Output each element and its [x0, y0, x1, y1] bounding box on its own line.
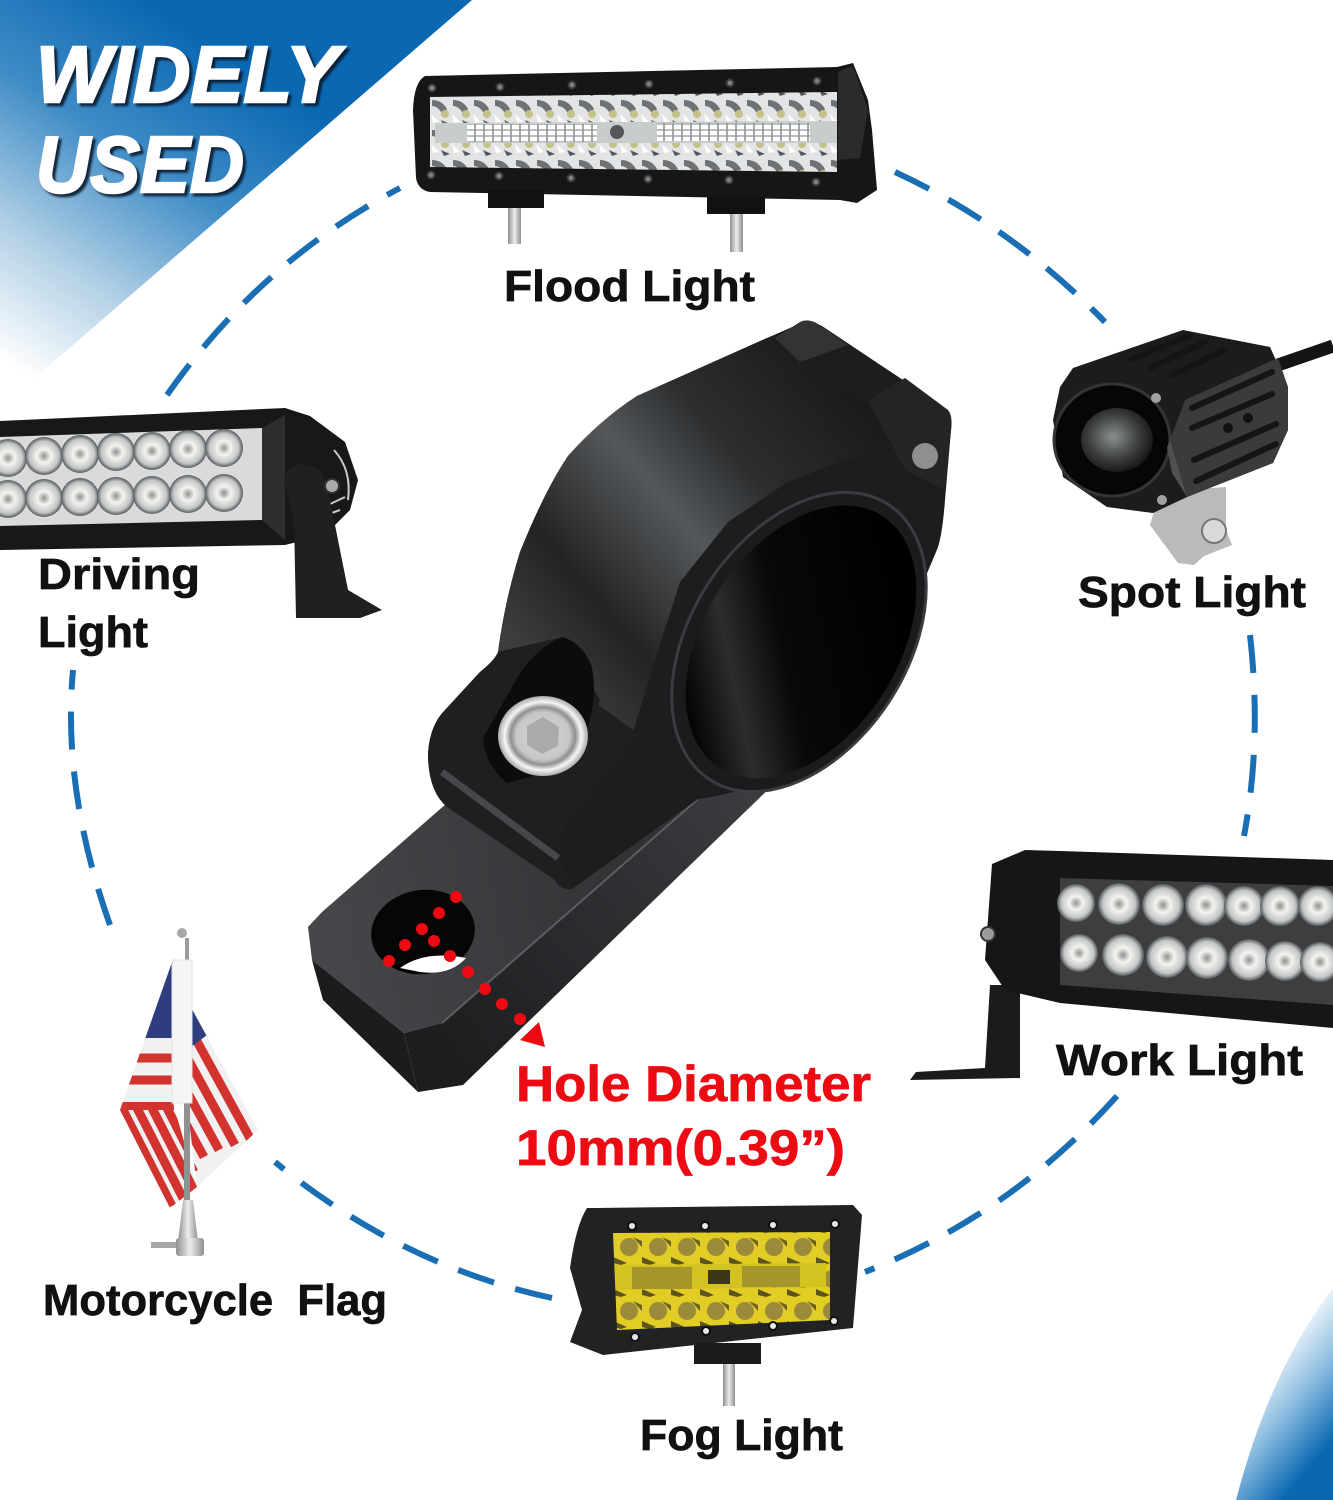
label: driving light	[38, 550, 200, 657]
work light mount	[910, 985, 1020, 1080]
product: spot light pod	[1053, 330, 1333, 565]
label: driving light: Light	[38, 608, 148, 657]
label: motorcycle flag: Motorcycle Flag	[43, 1276, 387, 1325]
work light body	[985, 850, 1333, 1028]
label: fog light: Fog Light	[640, 1411, 843, 1460]
clamp base plate top face	[308, 799, 698, 1033]
flag left panel	[120, 964, 197, 1208]
product: motorcycle flag	[120, 928, 258, 1256]
clamp barrel exterior	[498, 338, 897, 780]
clamp body front face	[428, 322, 951, 889]
hinge tabs	[775, 320, 952, 490]
central product: black mounting clamp	[308, 320, 979, 1092]
title: widely used: USED	[36, 120, 244, 209]
driving light mount	[284, 464, 382, 618]
product: fog light	[570, 1205, 862, 1406]
clamp base plate side face	[404, 720, 840, 1092]
label: flood light: Flood Light	[504, 262, 755, 311]
driving light body	[0, 408, 358, 550]
flood light body	[413, 63, 877, 203]
product: driving light bar	[0, 408, 382, 618]
callout: hole diameter: Hole Diameter	[516, 1056, 871, 1112]
label: driving light: Driving	[38, 550, 200, 599]
corner accent: bottom-right blue triangle	[1236, 1288, 1333, 1500]
product: flood light bar	[413, 63, 877, 252]
dashed ring connecting the accessories	[71, 172, 1255, 1298]
mounting hole	[366, 883, 480, 981]
label: work light: Work Light	[1056, 1036, 1303, 1085]
clamp ear	[428, 637, 640, 889]
label: spot light: Spot Light	[1078, 568, 1306, 617]
callout: hole diameter	[516, 1056, 871, 1176]
fog light body	[570, 1205, 862, 1355]
lens	[1054, 384, 1170, 496]
product: work light bar	[910, 850, 1333, 1080]
flag right panel	[190, 1010, 258, 1186]
callout: hole diameter: 10mm(0.39”)	[516, 1120, 845, 1176]
title: widely used: WIDELY	[36, 30, 346, 119]
bolt recess and hex bolt	[483, 637, 594, 783]
clamp base plate end face	[312, 960, 418, 1092]
fog light bracket and bolt	[694, 1343, 761, 1364]
driving light cooling fins	[326, 450, 349, 515]
silver bracket	[1150, 487, 1232, 565]
title: widely used	[36, 30, 346, 209]
hinge pin	[912, 443, 938, 469]
clamp ring opening	[619, 446, 979, 838]
corner banner: top-left blue triangle	[0, 0, 472, 408]
flag pole and base	[184, 1100, 190, 1210]
power cable	[1275, 346, 1333, 366]
red dashed pointer dots and arrowhead	[383, 891, 545, 1047]
